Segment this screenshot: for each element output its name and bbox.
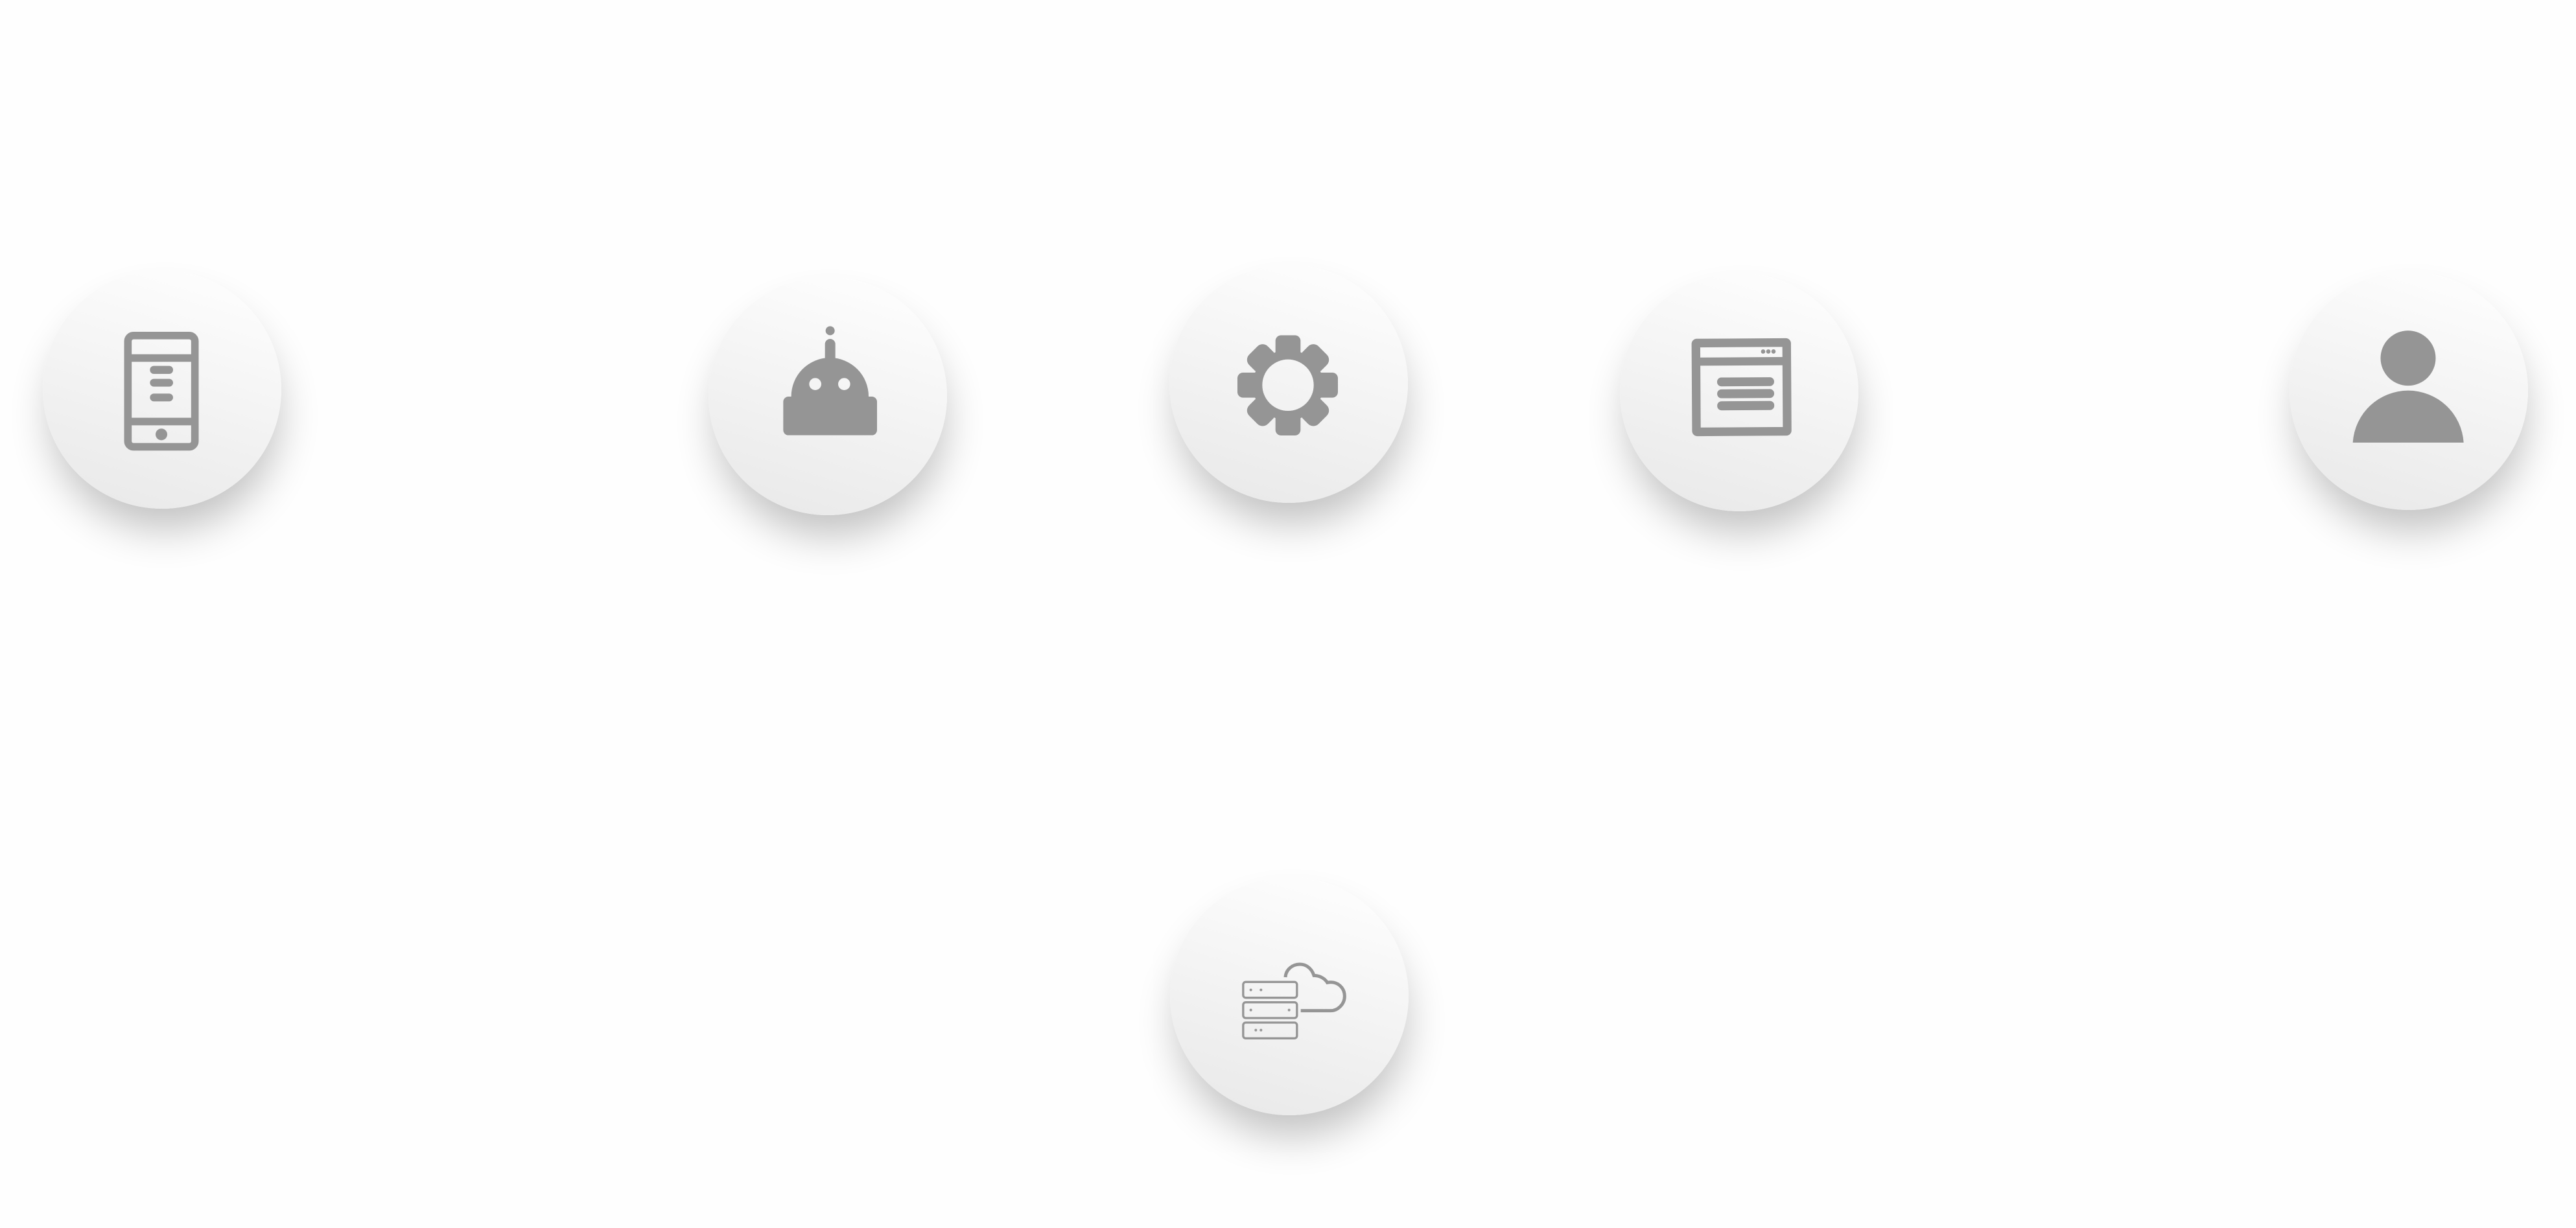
icon: server and cloud: [1243, 964, 1344, 1038]
icon: mobile phone: [128, 336, 195, 447]
node: robot: [708, 277, 947, 515]
node: server and cloud: [1170, 877, 1409, 1115]
icon: browser window: [1696, 343, 1787, 432]
node: mobile phone: [43, 270, 281, 509]
icon: gear: [1237, 335, 1338, 435]
node: browser window: [1620, 273, 1858, 511]
icon: robot: [783, 326, 877, 435]
node: user: [2289, 272, 2528, 510]
icon: user: [2353, 330, 2464, 443]
node: gear: [1169, 264, 1408, 503]
